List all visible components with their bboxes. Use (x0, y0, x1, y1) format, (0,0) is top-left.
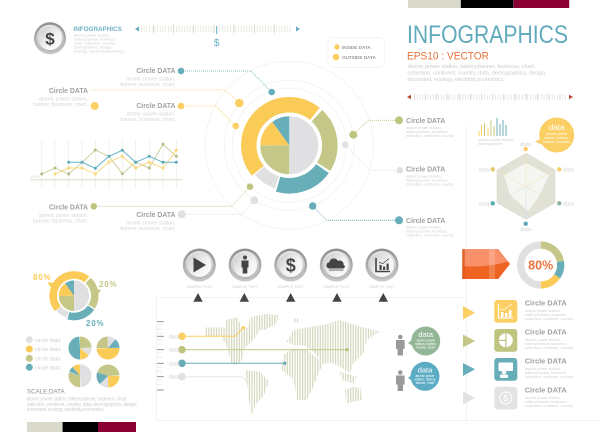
text block: scale data (26, 388, 138, 413)
button: dollar: $ (286, 256, 296, 276)
callout: yellow middle left (120, 103, 239, 129)
text block: scale data: collection, continent, country, data, demographics, design, (26, 402, 138, 408)
line chart: 100% (30, 174, 41, 179)
top ruler with dollar marker: $ (214, 38, 220, 49)
list item: olive pie icon: battery,banner, business, (525, 342, 567, 346)
pie inside donut (269, 125, 310, 166)
pie 4 (100, 368, 116, 384)
pie legend: circle data (35, 366, 61, 372)
callout: gray lower left: Circle DATA (136, 212, 176, 219)
list item: teal person icon: Circle DATA (525, 356, 567, 366)
callout: teal right: battery,banner, business, (406, 230, 448, 234)
list item: gray dollar icon: atomic power station, (525, 396, 561, 400)
person with blue bubble: banner, chart (416, 381, 434, 385)
callout: gray right: battery,banner, business, (406, 178, 448, 182)
callout: gray right: collection, continent, country (406, 182, 454, 186)
callout: olive right: atomic power station, (406, 126, 442, 130)
top ruler with dollar marker (135, 26, 300, 49)
pie 3 (72, 368, 88, 384)
pie 2 (100, 340, 116, 356)
text block: small infographics heading: chart, collection, country, (74, 42, 116, 46)
button: play (183, 248, 216, 289)
pie 1 (72, 340, 88, 356)
description text: collection, continent, country, data, demographics, design, (408, 70, 547, 76)
list item: gray dollar icon: battery,banner, business, (525, 400, 567, 404)
button: cloud: SAMPLE TEXT (323, 285, 350, 289)
callout: olive lower left: Circle DATA (49, 204, 88, 212)
radar chart: data (479, 202, 490, 208)
callout: gray lower left: banner, business, chart, (120, 226, 176, 232)
description text: atomic power station, battery,banner, business, chart, (408, 64, 536, 70)
radar chart: data (520, 227, 532, 233)
description text: document, ecology, electricity,economics, (408, 77, 505, 83)
list item: gray dollar icon: Circle DATA (525, 386, 567, 394)
gray series (169, 373, 250, 385)
button: person: SAMPLE TEXT (232, 285, 259, 289)
callout: yellow far left (33, 88, 244, 110)
person with green bubble (396, 326, 440, 356)
callout bubble: data (535, 118, 574, 152)
icon buttons (183, 248, 398, 289)
olive series: data (169, 348, 181, 354)
olive series (169, 346, 349, 354)
dotted frame around map (156, 127, 600, 420)
text block: scale data: document, ecology, electricity,economics, (26, 407, 105, 413)
top colour bar (408, 0, 569, 8)
person with blue bubble: atomic power (416, 374, 435, 378)
callout: yellow far left: atomic power station, (39, 96, 88, 102)
list item: teal person icon (494, 356, 573, 381)
callout: gray right: atomic power station, (406, 174, 442, 178)
callout bubble: data: banner, business (543, 140, 570, 144)
callout: yellow middle left: banner, business, chart, (120, 117, 176, 123)
callout bubble: data: atomic power (546, 132, 568, 136)
callout: teal right (309, 202, 454, 238)
list item: yellow chart icon (494, 298, 573, 323)
callout: olive right (349, 116, 454, 139)
legend: INSIDE DATA (342, 45, 371, 50)
person with blue bubble: station, battery (415, 378, 436, 382)
pie legend: circle data (35, 347, 61, 353)
text block: small infographics heading: ecology, electricity,economics, (74, 50, 125, 54)
radar chart: data (520, 142, 532, 148)
legend (328, 38, 384, 68)
list item: olive pie icon (494, 328, 573, 352)
text block: small infographics heading (74, 26, 125, 54)
map lines and markers (169, 326, 349, 385)
callout: olive lower left: banner, business, chart, (33, 218, 88, 224)
list item: yellow chart icon: atomic power station, (525, 309, 561, 313)
callout: teal top left: banner, business, chart, (120, 82, 176, 88)
callout: olive lower left: atomic power station, (39, 213, 88, 219)
teal series: data (169, 361, 181, 367)
callout: teal top left: atomic power station, (126, 76, 176, 82)
right ruler (407, 95, 573, 99)
mini bar chart: battery,banner, (478, 142, 503, 146)
radar chart: data (563, 168, 575, 174)
callout: yellow far left: banner, business, chart, (33, 102, 88, 108)
pie legend: circle data (35, 338, 61, 344)
concentric rings (205, 61, 373, 229)
callout bubble: data: data (549, 123, 565, 132)
callout: olive right: collection, continent, country (406, 134, 454, 138)
small pie charts (72, 340, 116, 384)
mini bar chart (478, 118, 514, 146)
button: cloud (320, 248, 353, 289)
list item: teal person icon: collection, continent, country (525, 375, 573, 379)
callout: olive right: Circle DATA (406, 118, 445, 125)
icon: dollar coin: $ (45, 30, 55, 48)
line chart (30, 140, 182, 188)
list item: yellow chart icon: battery,banner, business, (525, 313, 567, 317)
text block: scale data: SCALE:DATA (27, 388, 65, 396)
callout: yellow middle left: Circle DATA (136, 103, 176, 110)
gray series: data (169, 375, 181, 381)
orange ribbon arrow (462, 249, 510, 279)
percentage donut: 80% (528, 258, 553, 272)
list item: yellow chart icon: Circle DATA (525, 298, 567, 308)
person with green bubble: banner, chart (416, 346, 435, 350)
title: INFOGRAPHICS (407, 21, 568, 49)
callout: yellow middle left: atomic power station, (126, 112, 176, 118)
description text (408, 64, 547, 83)
radar chart (479, 142, 575, 233)
small donut chart (45, 266, 103, 325)
text block: small infographics heading: INFOGRAPHICS (74, 26, 122, 33)
text block: small infographics heading: demographics, design, (74, 46, 112, 50)
callout: teal right: collection, continent, country (406, 234, 454, 238)
person with green bubble: data (418, 330, 434, 339)
list item: olive pie icon: collection, continent, country (525, 346, 573, 350)
text block: small infographics heading: battery,banner, business, (74, 38, 116, 42)
donut percentage labels: 20% (99, 280, 117, 289)
subtitle: EPS10 : VECTOR (407, 50, 489, 62)
right list: arrows (463, 306, 475, 404)
list item: teal person icon: battery,banner, business, (525, 371, 567, 375)
icon: dollar coin (34, 22, 66, 54)
pie legend (26, 336, 61, 372)
person with green bubble: atomic power (416, 338, 436, 342)
radar chart: data (479, 168, 490, 174)
button: play: SAMPLE TEXT (186, 285, 213, 289)
callout: teal top left (120, 68, 275, 95)
callout: gray lower left: atomic power station, (126, 220, 176, 226)
callout: teal right: Circle DATA (406, 218, 445, 225)
donut percentage labels: 20% (86, 319, 104, 328)
button: chart (366, 248, 398, 289)
list item: gray dollar icon: collection, continent, country (525, 404, 573, 408)
callout: teal top left: Circle DATA (136, 68, 176, 75)
list item: gray dollar icon: $ (503, 393, 508, 403)
pointer triangles (193, 293, 388, 302)
bottom colour bar (27, 422, 136, 432)
yellow series (169, 326, 245, 340)
callout: olive lower left (33, 183, 253, 224)
world map (205, 314, 380, 414)
callout: gray lower left (120, 196, 258, 232)
pie legend: circle data (35, 356, 61, 362)
donut percentage labels: 80% (33, 273, 51, 282)
list item: teal person icon: atomic power station, (525, 367, 561, 371)
person with blue bubble (396, 362, 440, 391)
list item: yellow chart icon: collection, continent, country (525, 317, 573, 321)
button: dollar: SAMPLE TEXT (278, 285, 304, 289)
callout: olive right: battery,banner, business, (406, 130, 448, 134)
donut percentage labels (33, 273, 117, 328)
callout: gray right: Circle DATA (406, 167, 445, 174)
text block: scale data: atomic power station, battery,banner, business, chart, (26, 396, 128, 402)
person with blue bubble: data (418, 366, 433, 374)
button: person (228, 248, 262, 289)
button: chart: SAMPLE TEXT (369, 285, 396, 289)
yellow series: data (169, 334, 181, 340)
mini bar chart: atomic power station, (478, 138, 514, 142)
teal series (169, 360, 286, 367)
person with green bubble: station, battery (415, 342, 437, 346)
list item: olive pie icon: Circle DATA (525, 328, 567, 336)
callout: teal right: atomic power station, (406, 226, 442, 230)
text block: small infographics heading: atomic power station, (74, 34, 110, 38)
callout: gray right (342, 141, 454, 186)
percentage donut (513, 237, 569, 293)
radar chart: data (563, 202, 575, 208)
map scale ticks (157, 322, 164, 390)
donut chart (232, 88, 347, 203)
list item: gray dollar icon (494, 386, 573, 409)
button: dollar (274, 248, 307, 289)
callout: yellow far left: Circle DATA (49, 88, 88, 95)
list item: olive pie icon: atomic power station, (525, 338, 561, 342)
callout bubble: data: station, battery, (545, 136, 569, 140)
legend: OUTSIDE DATA (342, 55, 376, 60)
